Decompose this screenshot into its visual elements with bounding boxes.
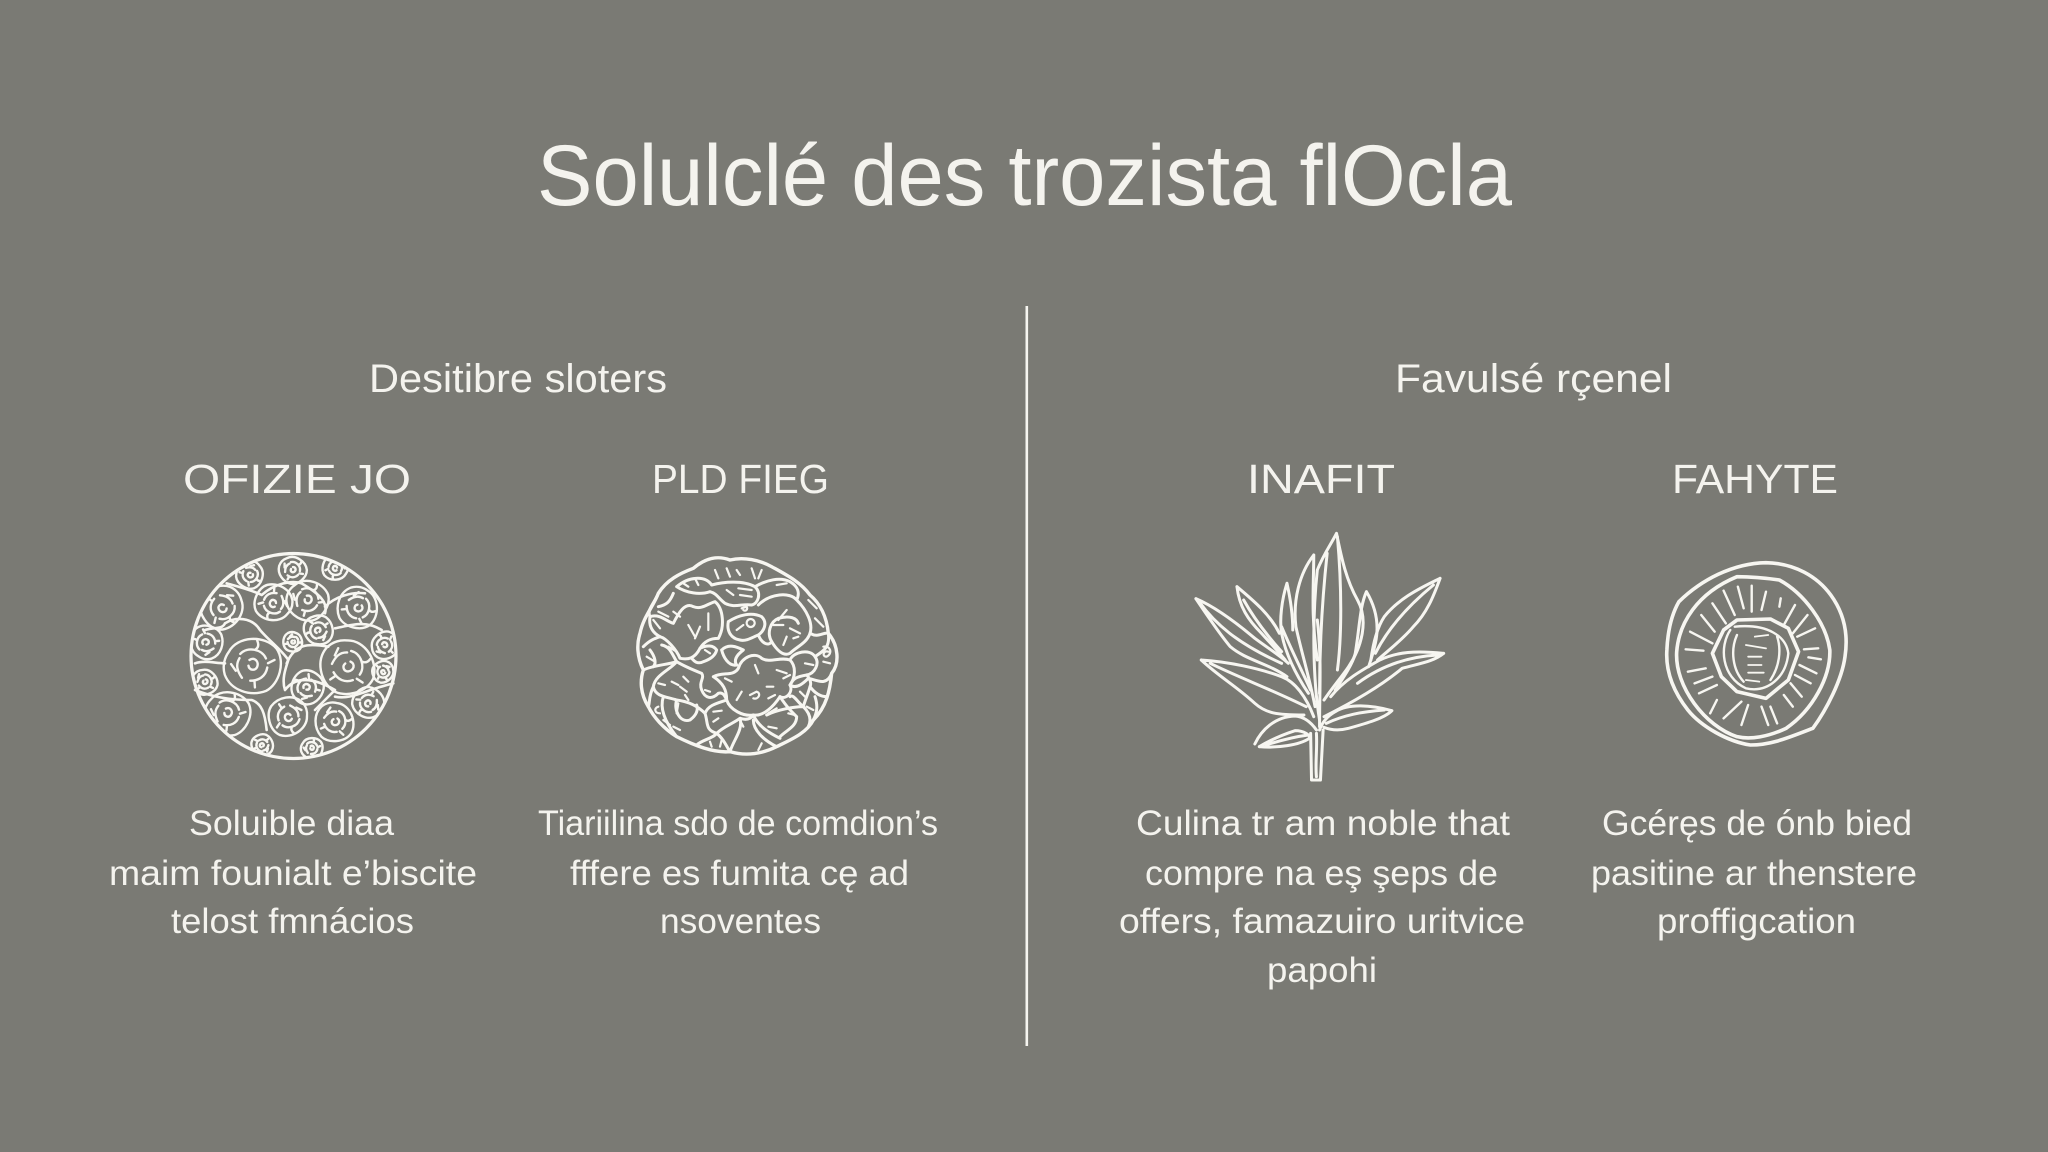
- panel: left section: [109, 357, 938, 941]
- column description: [1591, 804, 1917, 941]
- column description: proffigcation: [1657, 902, 1856, 941]
- column heading: OFIZIE JO: [183, 456, 411, 502]
- column description: [538, 804, 938, 941]
- column: OFIZIE JO: [109, 456, 477, 941]
- column heading: PLD FIEG: [652, 456, 829, 502]
- column description: [1119, 804, 1525, 990]
- column description: [109, 804, 477, 941]
- column description: papohi: [1267, 951, 1377, 990]
- column description: Soluible diaa: [189, 804, 395, 843]
- column description: compre na eş şeps de: [1145, 854, 1498, 893]
- title: Solulclé des trozista flOcla: [537, 128, 1512, 224]
- left section heading: Desitibre sloters: [369, 357, 667, 401]
- column description: Gcéręs de ónb bied: [1602, 804, 1912, 843]
- column description: Culina tr am noble that: [1136, 804, 1510, 843]
- column heading: INAFIT: [1247, 456, 1395, 502]
- column description: telost fmnácios: [171, 902, 414, 941]
- column: FAHYTE: [1591, 456, 1917, 941]
- column description: Tiariilina sdo de comdion’s: [538, 804, 938, 843]
- icon: leafy plant: [1196, 533, 1444, 780]
- icon: concentric ring with rays: [1667, 563, 1846, 745]
- column description: fffere es fumita cę ad: [570, 854, 909, 893]
- column description: pasitine ar thenstere: [1591, 854, 1917, 893]
- column description: nsoventes: [660, 902, 821, 941]
- icon: round rose-pattern cluster: [188, 551, 403, 760]
- column description: maim founialt e’biscite: [109, 854, 477, 893]
- panel: right section: [1119, 357, 1917, 990]
- column: PLD FIEG: [538, 456, 938, 941]
- column heading: FAHYTE: [1672, 456, 1838, 502]
- icon: round brain-like cluster: [638, 558, 837, 754]
- column: INAFIT: [1119, 456, 1525, 990]
- column description: offers, famazuiro uritvice: [1119, 902, 1525, 941]
- center divider line: [1026, 306, 1028, 1046]
- right section heading: Favulsé rçenel: [1395, 357, 1672, 401]
